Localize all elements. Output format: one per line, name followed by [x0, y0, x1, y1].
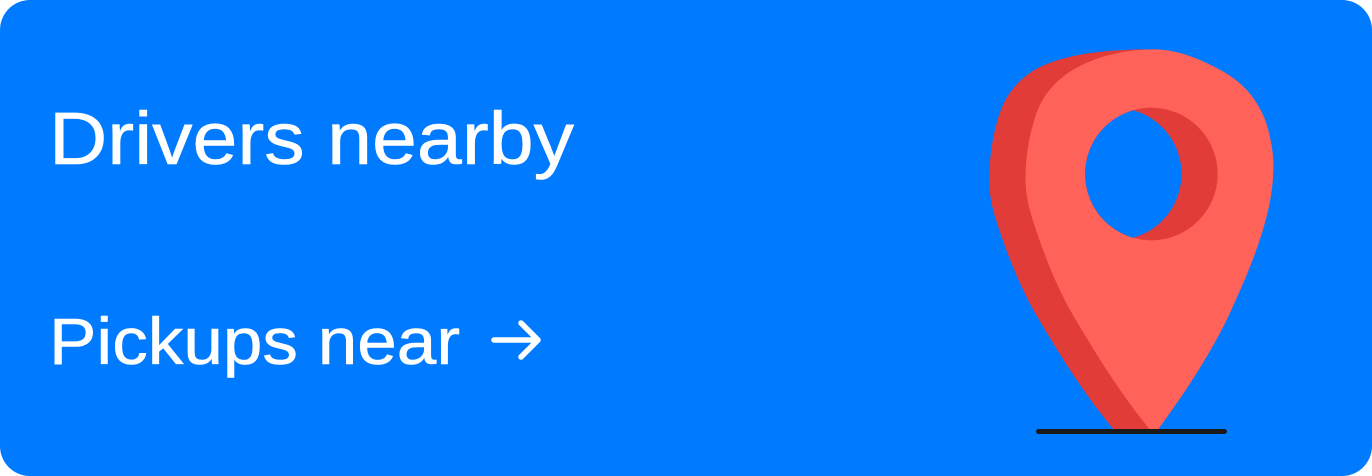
ground line: [1036, 429, 1227, 434]
pin front face: [1026, 49, 1273, 429]
link text: Pickups near: Pickups near: [49, 304, 460, 378]
heading: Drivers nearby: Drivers nearby: [49, 97, 574, 180]
icon: location pin: [989, 49, 1273, 429]
pin shadow side: [989, 49, 1160, 429]
pin hole opening: [1085, 110, 1182, 238]
pin hole inner wall: [1085, 108, 1218, 240]
icon: arrow: [494, 323, 538, 357]
